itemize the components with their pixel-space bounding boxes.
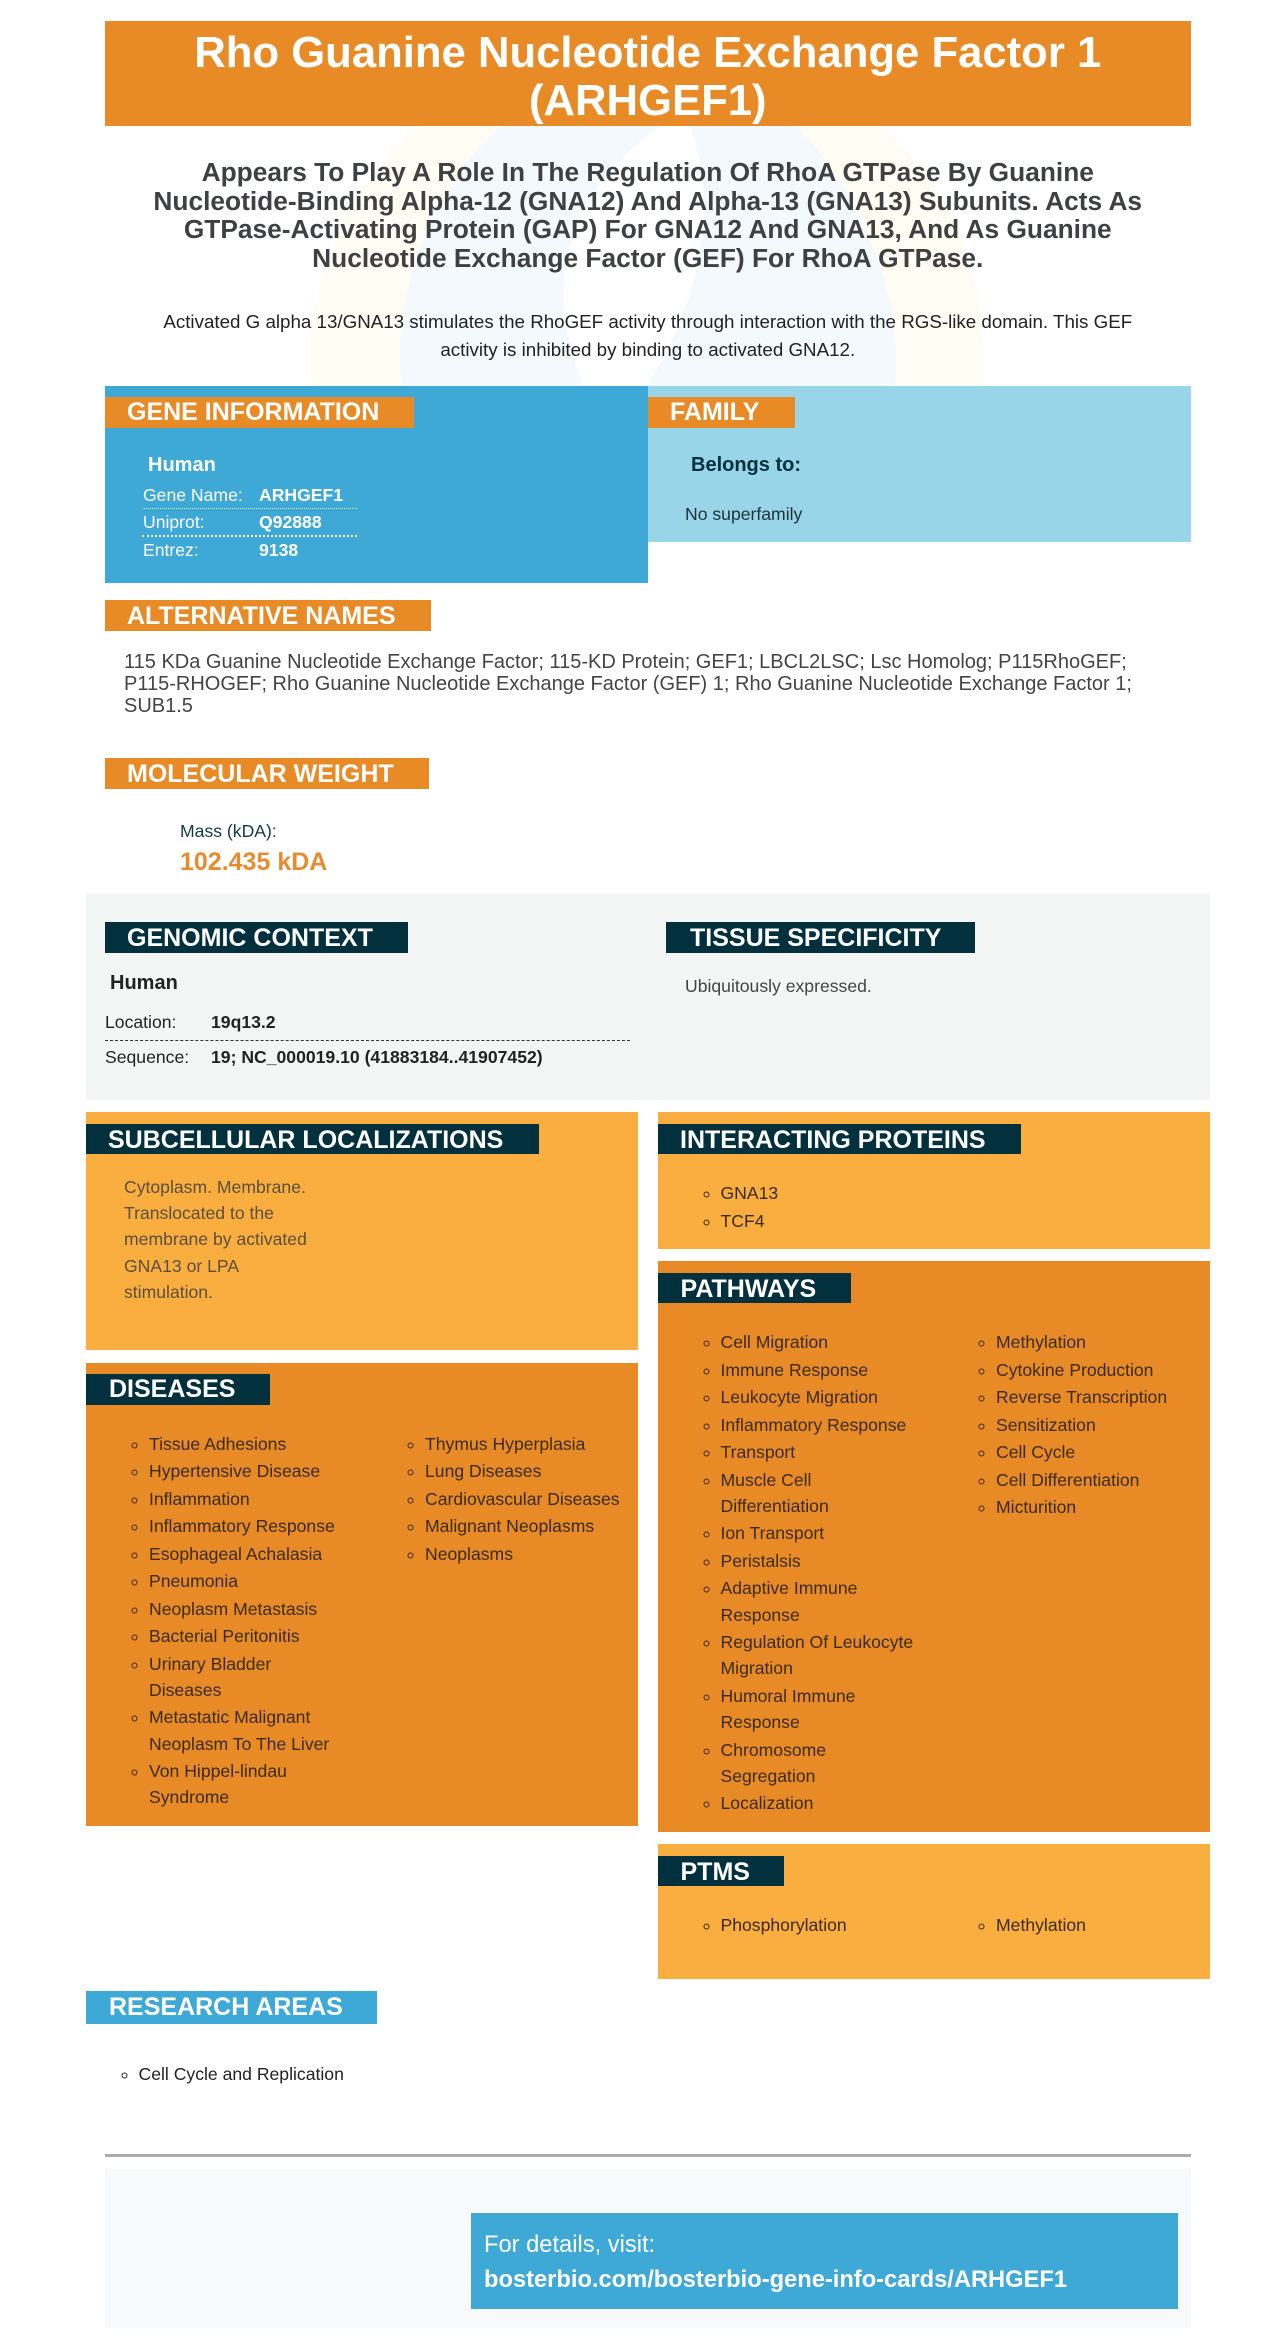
interacting proteins list: GNA13: [720, 1183, 778, 1203]
gene details table: Gene Name:: [143, 485, 243, 505]
heading: pathways: [658, 1273, 851, 1303]
disease list column 1: Bacterial Peritonitis: [149, 1626, 300, 1646]
research areas list: Cell Cycle and Replication: [138, 2064, 344, 2084]
footer divider: [105, 2154, 1190, 2157]
sequence row: Sequence:: [105, 1047, 189, 1067]
heading: research areas: [86, 1991, 377, 2024]
heading: family: [648, 397, 794, 428]
gene details table: ARHGEF1: [259, 485, 343, 505]
background watermark logo: [310, 126, 984, 386]
pathways list column 1: Migration: [720, 1658, 793, 1678]
disease list column 2: Lung Diseases: [425, 1461, 541, 1481]
heading: family: FAMILY: [670, 398, 759, 426]
pathways list column 2: [978, 1332, 1167, 1517]
panel: interacting proteins: [658, 1112, 1210, 1249]
disease list column 2: Thymus Hyperplasia: [425, 1434, 585, 1454]
pathways list column 2: Cytokine Production: [996, 1360, 1153, 1380]
subtitle summary: Appears To Play A Role In The Regulation Of RhoA GTPase By Guanine: [202, 157, 1094, 187]
callout: details link: [471, 2213, 1178, 2309]
callout: details link: bosterbio.com/bosterbio-gene-info-cards/ARHGEF1: [484, 2266, 1067, 2292]
interacting proteins list: [704, 1183, 778, 1230]
pathways list column 1: Immune Response: [720, 1360, 868, 1380]
panel: family: [648, 386, 1190, 542]
alternative names text: 115 KDa Guanine Nucleotide Exchange Factor; 115-KD Protein; GEF1; LBCL2LSC; Lsc Homolog; P115RhoGEF;: [124, 651, 1127, 673]
mass label: Mass (kDA):: [180, 821, 277, 841]
location row: [105, 1012, 276, 1032]
description paragraph: activity is inhibited by binding to activated GNA12.: [440, 339, 855, 360]
tissue specificity text: Ubiquitously expressed.: [685, 976, 872, 996]
gene details table: [142, 485, 357, 560]
alternative names text: [124, 651, 1132, 717]
pathways list column 1: Response: [720, 1712, 800, 1732]
heading: diseases: [86, 1374, 270, 1405]
gene details table: Uniprot:: [143, 512, 205, 532]
family value: No superfamily: [685, 504, 802, 524]
pathways list column 1: Regulation Of Leukocyte: [720, 1632, 913, 1652]
pathways list column 2: Cell Cycle: [996, 1442, 1075, 1462]
heading: molecular weight: MOLECULAR WEIGHT: [127, 760, 394, 788]
pathways list column 1: Cell Migration: [720, 1332, 828, 1352]
pathways list column 1: Ion Transport: [720, 1523, 824, 1543]
heading: genomic context: GENOMIC CONTEXT: [127, 924, 373, 952]
heading: research areas: RESEARCH AREAS: [109, 1993, 343, 2021]
disease list column 1: Metastatic Malignant: [149, 1707, 310, 1727]
description paragraph: Activated G alpha 13/GNA13 stimulates the RhoGEF activity through interaction with the RGS-like domain. This GEF: [163, 311, 1132, 332]
panel: footer: [105, 2169, 1190, 2328]
panel: genomic context and tissue specificity: [86, 893, 1210, 1100]
disease list column 1: Pneumonia: [149, 1571, 238, 1591]
panel: gene information: [105, 386, 648, 583]
heading: pathways: PATHWAYS: [680, 1275, 816, 1303]
pathways list column 1: Transport: [720, 1442, 795, 1462]
pathways list column 1: Localization: [720, 1793, 813, 1813]
disease list column 1: Urinary Bladder: [149, 1654, 271, 1674]
callout: details link: For details, visit:: [484, 2232, 655, 2258]
species label: Human: [110, 972, 178, 994]
subcellular text: GNA13 or LPA: [124, 1256, 239, 1276]
pathways list column 1: Peristalsis: [720, 1551, 801, 1571]
pathways list column 1: Segregation: [720, 1766, 815, 1786]
title banner: (ARHGEF1): [529, 76, 767, 125]
pathways list column 1: Adaptive Immune: [720, 1578, 857, 1598]
mass value: 102.435 kDA: [180, 848, 327, 876]
subcellular text: [124, 1177, 307, 1302]
heading: gene information: GENE INFORMATION: [127, 398, 379, 426]
gene details table: Q92888: [259, 512, 322, 532]
heading: alternative names: ALTERNATIVE NAMES: [127, 602, 396, 630]
subtitle summary: Nucleotide-Binding Alpha-12 (GNA12) And Alpha-13 (GNA13) Subunits. Acts As: [153, 186, 1142, 216]
location row: Location:: [105, 1012, 176, 1032]
belongs to label: Belongs to:: [691, 454, 801, 476]
subtitle summary: GTPase-Activating Protein (GAP) For GNA12 And GNA13, And As Guanine: [184, 214, 1112, 244]
pathways list column 1: Chromosome: [720, 1740, 826, 1760]
panel: ptms: [658, 1844, 1210, 1979]
subcellular text: Translocated to the: [124, 1203, 274, 1223]
pathways list column 1: Differentiation: [720, 1496, 829, 1516]
ptms list column 1: Phosphorylation: [720, 1915, 847, 1935]
title banner: Rho Guanine Nucleotide Exchange Factor 1: [194, 28, 1101, 77]
subtitle summary: Nucleotide Exchange Factor (GEF) For RhoA GTPase.: [312, 243, 983, 273]
pathways list column 2: Cell Differentiation: [996, 1470, 1139, 1490]
heading: ptms: PTMS: [680, 1858, 750, 1886]
disease list column 2: Neoplasms: [425, 1544, 513, 1564]
gene details table: Entrez:: [143, 540, 199, 560]
disease list column 2: [408, 1434, 620, 1564]
pathways list column 1: Response: [720, 1604, 800, 1624]
heading: interacting proteins: INTERACTING PROTEINS: [680, 1126, 986, 1154]
sequence row: [105, 1040, 630, 1075]
disease list column 1: Tissue Adhesions: [149, 1434, 286, 1454]
disease list column 2: Malignant Neoplasms: [425, 1516, 594, 1536]
gene details table: 9138: [259, 540, 298, 560]
sequence row: 19; NC_000019.10 (41883184..41907452): [211, 1047, 543, 1067]
disease list column 1: Inflammatory Response: [149, 1516, 335, 1536]
description paragraph: [163, 311, 1132, 360]
pathways list column 1: Inflammatory Response: [720, 1414, 906, 1434]
title banner: [105, 21, 1190, 126]
pathways list column 2: Sensitization: [996, 1414, 1096, 1434]
location row: 19q13.2: [211, 1012, 276, 1032]
heading: ptms: [658, 1856, 784, 1886]
heading: diseases: DISEASES: [109, 1375, 235, 1403]
alternative names text: SUB1.5: [124, 695, 193, 717]
pathways list column 2: Micturition: [996, 1497, 1076, 1517]
pathways list column 2: Methylation: [996, 1332, 1086, 1352]
pathways list column 1: Muscle Cell: [720, 1470, 811, 1490]
pathways list column 1: Humoral Immune: [720, 1686, 855, 1706]
subcellular text: membrane by activated: [124, 1229, 307, 1249]
subcellular text: stimulation.: [124, 1282, 213, 1302]
subcellular text: Cytoplasm. Membrane.: [124, 1177, 306, 1197]
subtitle summary: [153, 157, 1142, 273]
disease list column 1: Hypertensive Disease: [149, 1461, 320, 1481]
disease list column 1: Neoplasm To The Liver: [149, 1734, 329, 1754]
panel: subcellular localizations: [86, 1112, 638, 1350]
species label: Human: [148, 454, 216, 476]
panel: diseases: [86, 1363, 638, 1826]
disease list column 1: [132, 1434, 335, 1807]
disease list column 1: Von Hippel-lindau: [149, 1761, 287, 1781]
disease list column 1: Esophageal Achalasia: [149, 1544, 322, 1564]
heading: tissue specificity: TISSUE SPECIFICITY: [690, 924, 941, 952]
alternative names text: P115-RHOGEF; Rho Guanine Nucleotide Exchange Factor (GEF) 1; Rho Guanine Nucleotide Exchange Factor 1;: [124, 673, 1132, 695]
pathways list column 1: Leukocyte Migration: [720, 1387, 878, 1407]
ptms list column 2: Methylation: [996, 1915, 1086, 1935]
pathways list column 2: Reverse Transcription: [996, 1387, 1167, 1407]
disease list column 1: Inflammation: [149, 1488, 250, 1508]
disease list column 1: Diseases: [149, 1680, 221, 1700]
disease list column 1: Neoplasm Metastasis: [149, 1598, 317, 1618]
panel: pathways: [658, 1261, 1210, 1832]
heading: subcellular localizations: SUBCELLULAR LOCALIZATIONS: [108, 1126, 503, 1154]
disease list column 1: Syndrome: [149, 1787, 229, 1807]
interacting proteins list: TCF4: [720, 1210, 764, 1230]
pathways list column 1: [704, 1332, 913, 1813]
disease list column 2: Cardiovascular Diseases: [425, 1488, 620, 1508]
